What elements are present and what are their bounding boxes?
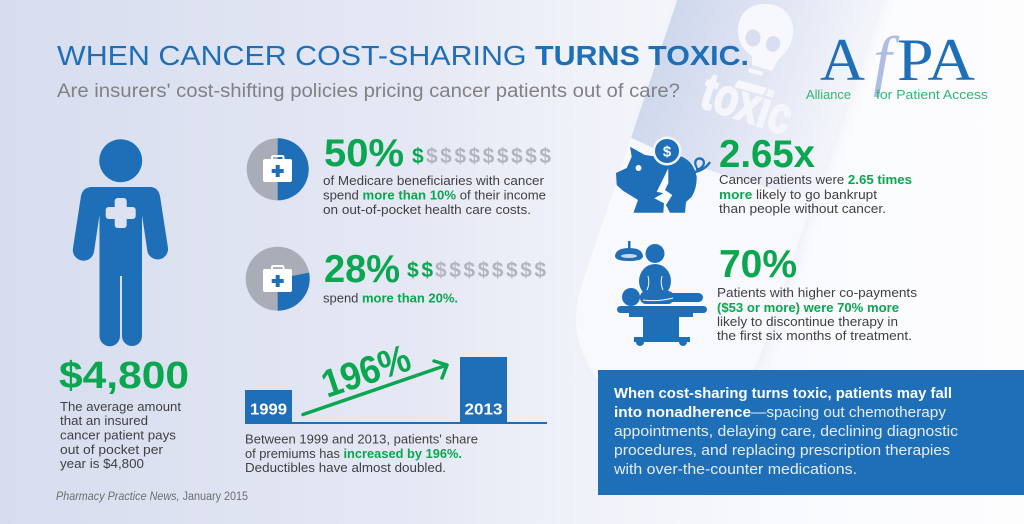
stat: 50%: spend more than 10% of their income [323, 188, 546, 202]
background pill capsule [549, 0, 932, 445]
stat: 2.65x: 2.65x [719, 133, 815, 176]
stat: 70%: Patients with higher co-payments [717, 285, 918, 300]
stat: $4,800: out of pocket per [60, 442, 164, 457]
icon: patient in treatment [615, 241, 707, 346]
stat: 2.65x: more likely to go bankrupt [719, 187, 877, 202]
callout: nonadherence: procedures, and replacing prescription therapies [614, 443, 950, 459]
pie chart: 50% [247, 138, 309, 200]
chart caption: Between 1999 and 2013, patients' share [245, 432, 478, 446]
logo: AfPA: f [873, 24, 900, 98]
stat: 2.65x [719, 133, 912, 216]
pie chart: 28% [246, 247, 310, 311]
stat: 28%: $$ [407, 259, 433, 282]
chart: premium growth 1999 to 2013: 196% [316, 337, 416, 407]
logo: AfPA: Alliance [806, 87, 851, 102]
icon: skull [734, 4, 793, 95]
toxic label on pill: toxic [694, 62, 800, 147]
stat: $4,800: year is $4,800 [60, 456, 144, 471]
stat: $4,800: that an insured [60, 413, 148, 428]
chart caption [245, 432, 478, 475]
callout: nonadherence: When cost-sharing turns toxic, patients may fall [614, 386, 952, 402]
logo: AfPA: for Patient Access [876, 87, 989, 102]
stat: 50%: on out-of-pocket health care costs. [323, 202, 531, 217]
stat: 70%: likely to discontinue therapy in [717, 314, 898, 329]
callout: nonadherence: into nonadherence —spacing out chemotherapy [614, 405, 947, 421]
callout: nonadherence [598, 370, 1024, 495]
chart caption: Deductibles have almost doubled. [245, 460, 446, 475]
stat: 28%: 28% [324, 248, 400, 291]
stat: 28%: spend more than 20%. [323, 290, 458, 306]
icon: broken piggy bank: $ [663, 144, 672, 160]
stat: $4,800: The average amount [60, 399, 181, 414]
stat: 70%: 70% [719, 243, 797, 286]
stat: 28% [323, 248, 546, 306]
stat: $4,800: $4,800 [59, 355, 189, 397]
stat: 2.65x: than people without cancer. [719, 201, 886, 216]
stat: 70% [717, 243, 918, 343]
stat: 70%: ($53 or more) were 70% more [717, 300, 899, 315]
chart: premium growth 1999 to 2013: 2013 [464, 402, 503, 418]
logo: AfPA: PA [897, 27, 975, 93]
source note: Pharmacy Practice News, January 2015 [56, 491, 248, 503]
stat: 50%: $ [412, 145, 424, 168]
subtitle: Are insurers' cost-shifting policies pricing cancer patients out of care? [57, 81, 680, 102]
stat: $4,800 [59, 355, 189, 471]
title: WHEN CANCER COST-SHARING TURNS TOXIC. [57, 40, 749, 71]
stat: 50%: of Medicare beneficiaries with cancer [323, 173, 545, 188]
stat: 2.65x: Cancer patients were 2.65 times [719, 172, 912, 187]
icon: broken piggy bank [616, 136, 710, 213]
stat: 50%: 50% [324, 132, 404, 175]
callout: nonadherence: appointments, delaying care, declining diagnostic [614, 424, 958, 440]
stat: 50%: $$$$$$$$$ [426, 145, 551, 168]
logo: AfPA [806, 24, 989, 102]
logo: AfPA: A [820, 27, 865, 93]
stat: 70%: the first six months of treatment. [717, 328, 912, 343]
chart: premium growth 1999 to 2013: 1999 [250, 402, 287, 418]
chart caption: of premiums has increased by 196%. [245, 446, 462, 461]
stat: $4,800: cancer patient pays [60, 428, 177, 442]
callout: nonadherence: with over-the-counter medications. [613, 462, 857, 478]
chart: premium growth 1999 to 2013 [245, 337, 547, 424]
icon: person with medical cross [73, 139, 168, 346]
stat: 28%: $$$$$$$$ [435, 259, 546, 282]
stat: 50% [323, 132, 551, 217]
